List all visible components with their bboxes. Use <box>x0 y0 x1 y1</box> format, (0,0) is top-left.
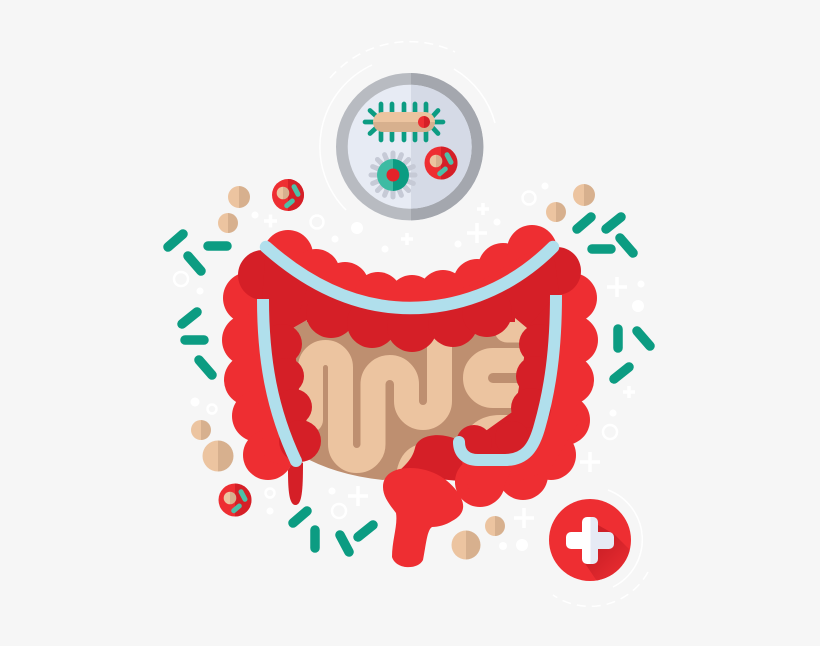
small intestine loops <box>310 315 535 485</box>
petri dish with microbes <box>320 42 495 220</box>
intestines illustration <box>222 225 598 567</box>
badge circle <box>549 499 631 581</box>
blue lining, left round end <box>290 455 302 467</box>
red blood cell, lower left <box>218 484 252 516</box>
tan spheres <box>191 184 595 560</box>
blood drip <box>288 458 303 505</box>
virus <box>362 144 424 206</box>
badge orbit arcs <box>553 490 648 606</box>
inner colon wall <box>238 247 581 482</box>
blue lining, transverse <box>266 247 553 308</box>
infographic canvas <box>163 41 655 607</box>
blue lining, right round end <box>453 436 465 448</box>
rod bacterium <box>365 104 443 140</box>
blue lining, left <box>263 299 296 461</box>
white cross <box>566 517 614 564</box>
rectum <box>383 468 463 567</box>
white decorative marks <box>174 182 644 551</box>
red blood cell, upper left <box>272 179 304 211</box>
lower colon lobes over inner wall <box>455 457 515 507</box>
blue lining, right <box>459 295 556 460</box>
outer colon lobes <box>222 225 598 505</box>
red blood cell in dish <box>424 146 458 180</box>
abdominal cavity <box>293 320 527 480</box>
dish rim and plate <box>336 73 483 220</box>
cross shadow <box>585 525 630 580</box>
teal bacteria rods <box>168 217 650 552</box>
medical cross badge <box>549 490 648 607</box>
dish orbit arcs <box>320 42 495 210</box>
